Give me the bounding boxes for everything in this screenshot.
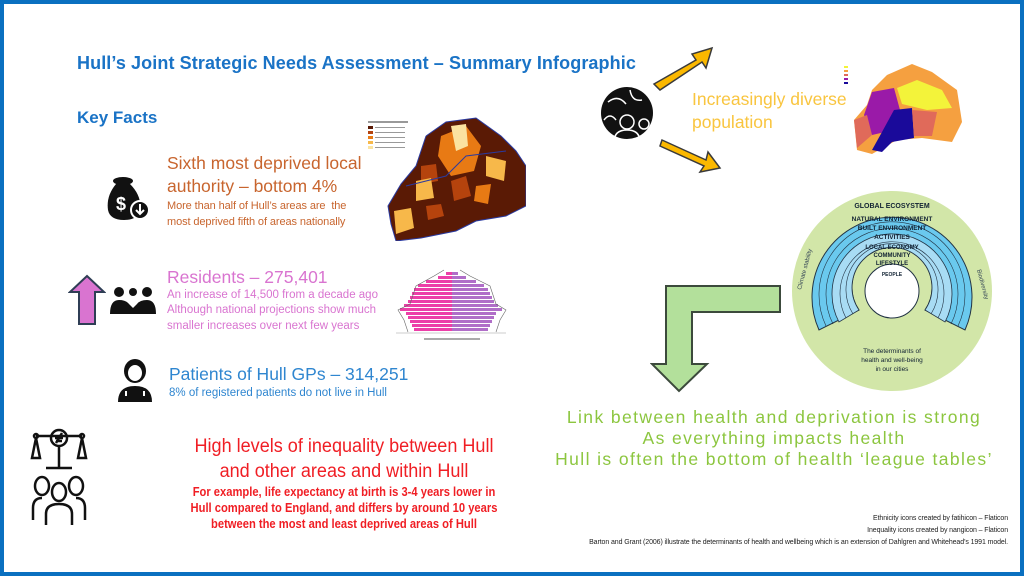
chart: population pyramid: [396, 270, 506, 340]
text block: residents: [167, 267, 378, 332]
diagram: health determinants wheel: GLOBAL ECOSYSTEM: [854, 203, 930, 210]
text block: residents: An increase of 14,500 from a decade ago: [167, 289, 378, 301]
text block: residents: Although national projections show much: [167, 304, 376, 316]
diagram: health determinants wheel: Climate stability: [797, 248, 814, 291]
diagram: health determinants wheel: LOCAL ECONOMY: [865, 245, 919, 251]
diagram: health determinants wheel: ACTIVITIES: [874, 234, 911, 241]
text block: health link: [555, 407, 993, 469]
diagram: health determinants wheel: in our cities: [876, 366, 909, 373]
diagram: health determinants wheel: LIFESTYLE: [876, 261, 908, 267]
text: increasingly diverse population: Increasingly diverse: [692, 89, 847, 109]
icon: diverse population: [601, 87, 653, 139]
diagram: health determinants wheel: COMMUNITY: [874, 253, 910, 259]
diagram: health determinants wheel: PEOPLE: [882, 272, 903, 278]
diagram: health determinants wheel: Biodiversity: [975, 269, 989, 300]
text block: inequality: For example, life expectancy at birth is 3-4 years lower in: [193, 484, 495, 499]
diagram: health determinants wheel: The determinants of: [863, 348, 921, 355]
arrow: green L-shaped down: [650, 285, 781, 392]
icon: money bag: $: [116, 194, 126, 214]
icon: money bag: [108, 177, 148, 220]
text block: deprivation: most deprived fifth of areas nationally: [167, 216, 345, 228]
heading: key facts: Key Facts: [77, 108, 157, 127]
diagram: health determinants wheel: NATURAL ENVIRONMENT: [852, 216, 932, 223]
text block: residents: Residents – 275,401: [167, 267, 328, 287]
credits: Inequality icons created by nangicon – Flaticon: [867, 527, 1008, 534]
diagram: health determinants wheel: [792, 191, 992, 391]
credits: [589, 514, 1008, 546]
text block: inequality: and other areas and within Hull: [220, 461, 468, 482]
text block: health link: As everything impacts health: [643, 428, 905, 448]
map: deprivation: [368, 118, 526, 241]
text block: GP patients: 8% of registered patients do not live in Hull: [169, 387, 387, 399]
icon: purple up arrow: [68, 274, 106, 325]
text block: deprivation: [167, 153, 362, 228]
text block: deprivation: Sixth most deprived local: [167, 153, 362, 173]
text block: inequality: between the most and least deprived areas of Hull: [211, 516, 477, 531]
diagram: health determinants wheel: health and well-being: [861, 357, 923, 364]
text block: GP patients: [169, 364, 408, 399]
icon: inequality scales with people: [30, 428, 88, 525]
text block: GP patients: Patients of Hull GPs – 314,251: [169, 364, 408, 384]
text block: residents: smaller increases over next few years: [167, 320, 359, 332]
map: ethnicity: [844, 64, 962, 154]
icon: doctor: [118, 359, 152, 402]
text block: deprivation: authority – bottom 4%: [167, 176, 337, 196]
credits: Barton and Grant (2006) illustrate the determinants of health and wellbeing which is an extension of Dahlgren and Whitehead’s 1991 model.: [589, 539, 1008, 546]
credits: Ethnicity icons created by fatihicon – Flaticon: [873, 515, 1008, 522]
text: increasingly diverse population: population: [692, 112, 773, 132]
arrow: yellow up-right: [652, 46, 714, 91]
text: increasingly diverse population: [692, 89, 847, 132]
diagram: health determinants wheel: BUILT ENVIRONMENT: [858, 225, 926, 232]
text block: health link: Link between health and deprivation is strong: [567, 407, 981, 427]
title: Hull’s Joint Strategic Needs Assessment – Summary Infographic: [77, 53, 636, 73]
text block: deprivation: More than half of Hull’s areas are the: [167, 200, 346, 212]
text block: inequality: Hull compared to England, and differs by around 10 years: [191, 500, 497, 515]
text block: inequality: [191, 436, 497, 531]
text block: health link: Hull is often the bottom of health ‘league tables’: [555, 449, 993, 469]
icon: people group: [110, 287, 156, 314]
arrow: yellow down-right: [659, 139, 722, 174]
text block: inequality: High levels of inequality between Hull: [194, 436, 493, 457]
